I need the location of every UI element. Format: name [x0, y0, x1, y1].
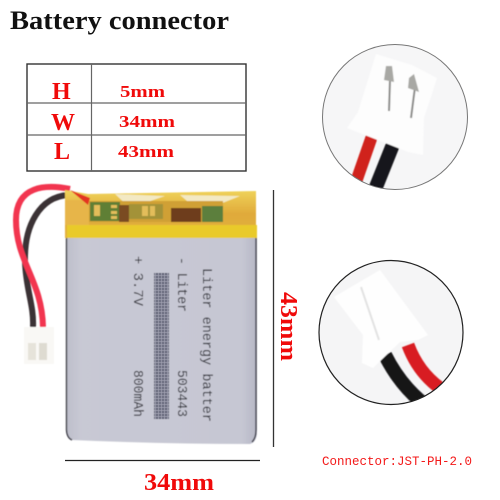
printed label: liter: - Liter [173, 257, 189, 312]
red wire [16, 187, 70, 327]
connector caption: Connector:JST-PH-2.0 [322, 454, 472, 469]
printed label: voltage: + 3.7V [129, 256, 145, 307]
printed label: capacity: 800mAh [129, 370, 145, 417]
black wire [385, 355, 424, 404]
row: height: H [52, 79, 71, 105]
battery illustration [16, 187, 257, 444]
connector detail: pins [322, 44, 468, 192]
width label: 34mm [144, 470, 214, 496]
row: length [54, 139, 174, 165]
printed label: energy: Liter energy batter [198, 268, 214, 422]
dimensions table [27, 64, 246, 171]
width dimension line [65, 460, 260, 462]
row: height: 5mm [120, 82, 165, 101]
metal tabs [384, 66, 419, 92]
connector detail: housing [319, 260, 463, 404]
black wire [25, 195, 68, 327]
yellow tape and circuit [65, 190, 257, 238]
row: width [51, 110, 175, 136]
black wire [374, 142, 394, 192]
printed label: model: 503443 [173, 370, 189, 417]
plug body [365, 66, 417, 150]
row: length: L [54, 139, 70, 165]
row: length: 43mm [118, 142, 174, 161]
barcode [154, 273, 169, 419]
row: width: W [51, 110, 75, 136]
small plug [24, 327, 54, 364]
red wire [408, 345, 440, 388]
plug body [334, 270, 428, 368]
red wire [356, 136, 372, 182]
metal pins [389, 80, 415, 118]
row: width: 34mm [119, 112, 175, 131]
silver cell [66, 236, 257, 444]
height dimension line [272, 190, 274, 447]
title: Battery connector [10, 6, 229, 35]
height label: 43mm [275, 292, 301, 361]
row: height [52, 79, 165, 105]
